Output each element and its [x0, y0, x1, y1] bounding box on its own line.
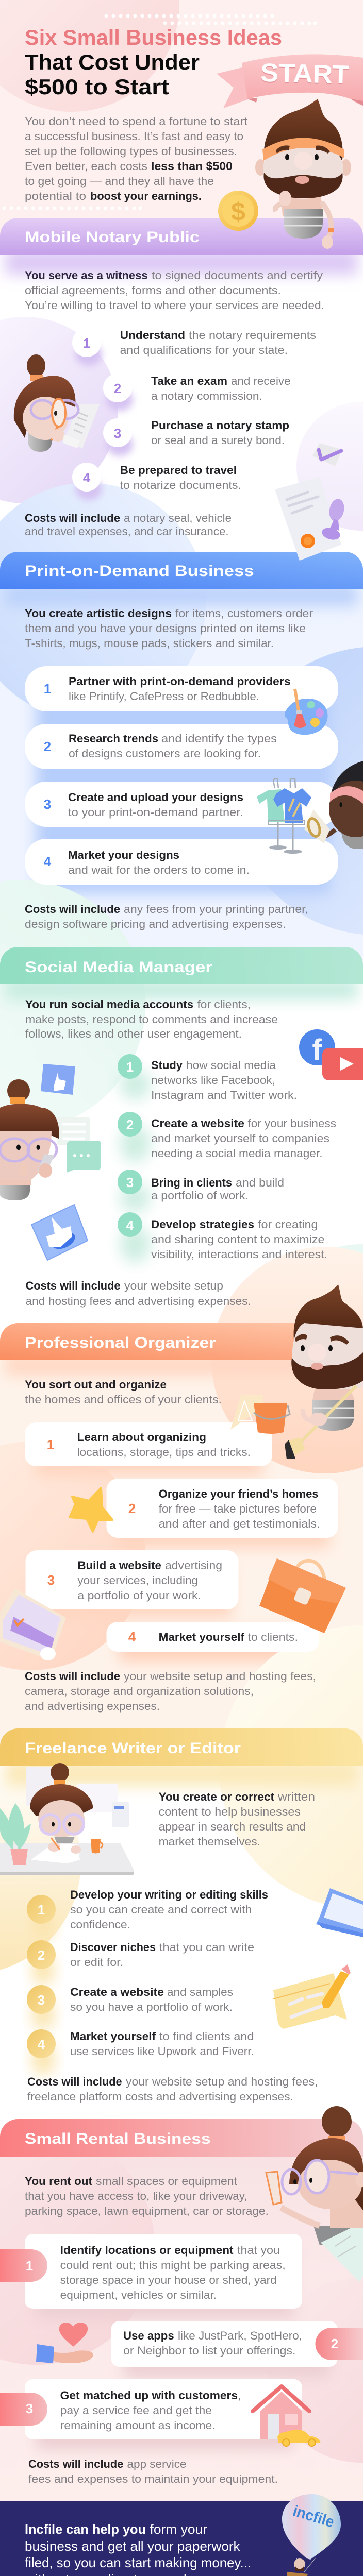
icon: man with headband: [255, 99, 351, 249]
step 1: so you can create and correct with: [70, 1903, 252, 1916]
title: $500 to Start: [25, 75, 169, 99]
card 2: 2: [331, 2336, 338, 2351]
card 1: Identify locations or equipment: [60, 2244, 234, 2257]
description: parking space, lawn equipment, car or storage.: [25, 2205, 269, 2217]
heading band: freelance writer: Freelance Writer or Editor: [25, 1740, 241, 1757]
costs: Costs will include: [26, 1279, 121, 1292]
step 3: and samples: [167, 1986, 233, 1998]
icon: heart over hand: [36, 2323, 93, 2363]
costs: freelance platform costs and advertising expenses.: [27, 2090, 293, 2103]
card 3: Create and upload your designs: [68, 791, 243, 804]
panel: footer call to action: [0, 2501, 363, 2576]
step 3: 3: [114, 426, 121, 441]
intro hero panel text: [2, 14, 317, 210]
panel: professional organizer: [0, 1323, 363, 1713]
intro paragraph: a successful business. It’s fast and easy to: [25, 130, 243, 143]
panel: footer call to action: form your: [150, 2521, 207, 2537]
step 2: or edit for.: [70, 1956, 123, 1969]
card 1: equipment, vehicles or similar.: [60, 2289, 217, 2301]
heading band: social media manager: Social Media Manager: [25, 959, 212, 976]
title: [25, 25, 282, 99]
icon: t-shirts on stands: [257, 778, 311, 854]
intro paragraph: potential to: [25, 190, 86, 202]
step 1: [27, 1888, 268, 1940]
icon: gold star: [70, 1488, 112, 1532]
description: You sort out and organize: [25, 1378, 167, 1391]
step 3: and build: [236, 1176, 284, 1189]
step 2: 2: [126, 1117, 134, 1132]
step 3: 3: [38, 1992, 45, 2008]
icon: girl with phone: [0, 1079, 101, 1200]
card 2: 2: [128, 1501, 136, 1516]
description: [25, 2175, 269, 2217]
icon: girl with phone and clipboard: [266, 2106, 363, 2282]
step 2: [118, 1112, 336, 1162]
step 2: for your business: [248, 1117, 336, 1130]
costs: app service: [127, 2458, 187, 2470]
step 4: 4: [126, 1217, 134, 1233]
card 2: Research trends: [69, 732, 158, 745]
icon: gold coin: $: [231, 197, 245, 226]
step 2: 2: [38, 1947, 45, 1963]
costs: and hosting fees and advertising expenses.: [26, 1295, 251, 1308]
decorative dot rows: [2, 14, 317, 210]
card 3: Build a website: [77, 1559, 161, 1572]
description: for items, customers order: [175, 607, 314, 620]
description: the homes and offices of your clients.: [25, 1393, 222, 1406]
heading band: social media manager: [0, 947, 363, 984]
icon: START ribbon: START: [260, 58, 350, 89]
card 2: [106, 1479, 338, 1538]
step 2: needing a social media manager.: [151, 1147, 323, 1160]
step 1: how social media: [186, 1059, 276, 1072]
costs: fees and expenses to maintain your equipment.: [28, 2472, 278, 2485]
intro paragraph: Even better, each costs: [25, 160, 147, 173]
description: [25, 1378, 222, 1406]
costs: your website setup and hosting fees,: [124, 1670, 316, 1683]
costs: camera, storage and organization solutions,: [25, 1685, 254, 1698]
step 4: [72, 463, 241, 500]
step 2: [103, 374, 291, 411]
heading band: print-on-demand: [0, 552, 363, 589]
description: them and you have your designs printed on items like: [25, 622, 306, 635]
card 3: 3: [44, 796, 51, 812]
costs: design software pricing and advertising expenses.: [25, 918, 286, 930]
description: You serve as a witness: [25, 269, 147, 282]
costs: [27, 2075, 318, 2103]
card 1: 1: [47, 1437, 54, 1452]
step 1: Develop your writing or editing skills: [70, 1888, 268, 1901]
card 2: of designs customers are looking for.: [69, 747, 261, 760]
step 3: [118, 1170, 284, 1212]
icon: laptop: [316, 1888, 363, 1937]
card 2: [25, 724, 338, 769]
icon: facebook badge: f: [312, 1033, 322, 1067]
step 4: to find clients and: [159, 2030, 254, 2043]
step 1: and qualifications for your state.: [120, 344, 288, 357]
step 4: 4: [83, 470, 91, 485]
card 2: or Neighbor to list your offerings.: [123, 2344, 295, 2357]
step 3: Purchase a notary stamp: [151, 419, 289, 432]
card 3: ,: [238, 2389, 241, 2402]
icon: girl with magnifier and paper: [14, 354, 100, 452]
icon: incfile hot air balloon: [282, 2494, 341, 2576]
step 1: confidence.: [70, 1918, 130, 1931]
description: market themselves.: [159, 1835, 260, 1848]
step 1: networks like Facebook,: [151, 1074, 275, 1087]
icon: orange briefcase: [259, 1558, 346, 1633]
icon: gold coin: [218, 191, 258, 231]
panel: mobile notary public: [0, 218, 363, 538]
step 1: 1: [126, 1059, 134, 1075]
step 4: use services like Upwork and Fiverr.: [70, 2045, 254, 2058]
step 4: to notarize documents.: [120, 479, 241, 492]
step 4: 4: [38, 2037, 45, 2052]
step 4: and sharing content to maximize: [151, 1233, 325, 1246]
step 1: 1: [38, 1902, 45, 1918]
card 2: and after and get testimonials.: [159, 1517, 320, 1530]
card 1: Partner with print-on-demand providers: [69, 675, 291, 688]
heading band: mobile notary public: [0, 218, 363, 255]
card 1: 1: [44, 681, 51, 697]
icon: stamped document: [275, 477, 346, 561]
step 4: Develop strategies: [151, 1218, 254, 1231]
card 2: [111, 2321, 363, 2367]
card 4: Market yourself: [159, 1631, 245, 1643]
icon: writer girl at desk: [0, 1763, 134, 1875]
step 3: a portfolio of work.: [151, 1189, 249, 1202]
heading band: small rental: Small Rental Business: [25, 2130, 211, 2147]
step 1: [118, 1054, 297, 1101]
heading band: freelance writer: [0, 1728, 363, 1766]
description: [25, 607, 314, 650]
icon: paint palette: [285, 689, 328, 735]
description: You’re willing to travel to where your services are needed.: [25, 299, 324, 312]
step 2: a notary commission.: [151, 389, 262, 402]
description: for clients,: [197, 998, 251, 1011]
step 2: that you can write: [159, 1941, 254, 1954]
icon: like tile lower: [31, 1205, 88, 1260]
costs: Costs will include: [25, 903, 120, 916]
costs: and advertising expenses.: [25, 1700, 160, 1713]
icon: wet floor sign and orange bucket: [230, 1395, 290, 1434]
description: You run social media accounts: [25, 998, 193, 1011]
step 1: the notary requirements: [189, 329, 316, 342]
step 3: or seal and a surety bond.: [151, 434, 285, 447]
step 2: Create a website: [151, 1117, 244, 1130]
step 1: 1: [83, 335, 90, 351]
card 4: and wait for the orders to come in.: [68, 863, 250, 876]
intro paragraph: boost your earnings.: [90, 190, 202, 202]
description: to signed documents and certify: [152, 269, 323, 282]
description: official agreements, forms and other documents.: [25, 284, 281, 297]
costs: your website setup: [124, 1279, 223, 1292]
card 4: [25, 839, 338, 885]
description: small spaces or equipment: [96, 2175, 238, 2188]
step 2: and receive: [231, 375, 291, 387]
card 3: your services, including: [77, 1574, 198, 1587]
icon: woman with braids and design: [304, 761, 363, 849]
intro paragraph: to get going — and they all have the: [25, 175, 214, 188]
card 1: [25, 666, 338, 711]
heading band: small rental: [0, 2119, 363, 2157]
costs: any fees from your printing partner,: [124, 903, 308, 916]
step 3: 3: [126, 1175, 134, 1190]
card 3: advertising: [165, 1559, 222, 1572]
panel: print-on-demand business: [0, 552, 363, 930]
card 3: pay a service fee and get the: [60, 2404, 212, 2417]
step 2: 2: [114, 381, 121, 396]
heading band: print-on-demand: Print-on-Demand Business: [25, 563, 254, 580]
card 4: 4: [128, 1629, 136, 1645]
description: [25, 998, 278, 1040]
costs: [28, 2458, 278, 2485]
costs: Costs will include: [28, 2458, 123, 2470]
step 1: Instagram and Twitter work.: [151, 1089, 297, 1101]
card 2: Use apps: [123, 2329, 174, 2342]
icon: checkmark tile: [312, 443, 342, 466]
card 2: 2: [44, 739, 51, 754]
card 1: like Printify, CafePress or Redbubble.: [69, 690, 259, 703]
heading band: professional organizer: [0, 1323, 363, 1360]
card 2: Organize your friend’s homes: [159, 1487, 319, 1500]
intro paragraph: set up the following types of businesses.: [25, 145, 237, 158]
card 3: to your print-on-demand partner.: [68, 806, 243, 819]
heading band: professional organizer: Professional Organizer: [25, 1334, 216, 1351]
step 4: [27, 2029, 254, 2075]
description: written: [277, 1790, 315, 1803]
description: You create artistic designs: [25, 607, 172, 620]
title: Six Small Business Ideas: [25, 25, 282, 49]
step 4: Be prepared to travel: [120, 464, 237, 477]
panel: social media manager: [0, 947, 363, 1308]
intro paragraph: You don’t need to spend a fortune to start: [25, 115, 248, 128]
step 3: Bring in clients: [151, 1176, 232, 1189]
costs: [26, 1279, 251, 1308]
step 2: Discover niches: [70, 1941, 156, 1954]
card 2: and identify the types: [161, 732, 277, 745]
costs: Costs will include: [25, 512, 120, 524]
costs: your website setup and hosting fees,: [126, 2075, 318, 2088]
costs: Costs will include: [25, 1670, 120, 1683]
icon: START ribbon: [217, 54, 363, 108]
card 1: 1: [26, 2258, 33, 2274]
icon: tablet with check: [0, 1588, 66, 1660]
card 2: like JustPark, SpotHero,: [178, 2329, 302, 2342]
card 4: [106, 1622, 319, 1652]
costs: and travel expenses, and car insurance.: [25, 525, 229, 538]
card 3: 3: [47, 1572, 55, 1588]
card 1: [25, 1422, 272, 1466]
intro paragraph: less than $500: [151, 160, 233, 173]
intro paragraph: [25, 115, 248, 202]
card 1: Learn about organizing: [77, 1431, 206, 1444]
step 2: [27, 1940, 254, 1985]
card 2: for free — take pictures before: [159, 1502, 317, 1515]
step 1: Study: [151, 1059, 183, 1072]
panel: small rental business: [0, 2119, 363, 2485]
step 4: Market yourself: [70, 2030, 156, 2043]
icon: speech bubble with pencil: [273, 1964, 351, 2029]
costs: Costs will include: [27, 2075, 122, 2088]
card 1: locations, storage, tips and tricks.: [77, 1446, 251, 1459]
step 3: [27, 1985, 233, 2030]
panel: footer call to action: business and get all your paperwork: [25, 2538, 241, 2554]
card 3: [26, 1550, 238, 1609]
card 3: a portfolio of your work.: [77, 1589, 201, 1602]
description: [25, 269, 324, 312]
title: That Cost Under: [25, 50, 200, 74]
costs: [25, 903, 308, 930]
card 1: that you: [237, 2244, 280, 2257]
icon: video play tile: [322, 1048, 363, 1080]
card 4: 4: [44, 854, 52, 869]
step 3: [103, 418, 289, 456]
card 1: [0, 2234, 302, 2309]
description: follows, likes and other user engagement.: [25, 1027, 242, 1040]
step 4: [118, 1212, 327, 1263]
step 3: so you have a portfolio of work.: [70, 2001, 233, 2013]
icon: incfile hot air balloon: incfile: [291, 2502, 336, 2531]
step 4: for creating: [258, 1218, 318, 1231]
card 1: storage space in your house or shed, yard: [60, 2274, 277, 2286]
step 4: visibility, interactions and interest.: [151, 1248, 327, 1261]
card 1: could rent out; this might be parking areas,: [60, 2259, 286, 2272]
card 4: to clients.: [248, 1631, 298, 1643]
costs: [25, 512, 232, 538]
description: make posts, respond to comments and increase: [25, 1013, 278, 1026]
panel: footer call to action: filed, so you can start making money...: [25, 2555, 251, 2570]
description: that you have access to, like your driveway,: [25, 2190, 248, 2202]
description: content to help businesses: [159, 1805, 301, 1818]
heading band: mobile notary public: Mobile Notary Public: [25, 229, 200, 246]
step 3: Create a website: [70, 1986, 164, 1998]
costs: [25, 1670, 316, 1713]
step 1: [72, 328, 316, 366]
costs: a notary seal, vehicle: [124, 512, 232, 524]
card 4: Market your designs: [68, 849, 179, 861]
description: appear in search results and: [159, 1820, 306, 1833]
card 3: [25, 782, 338, 827]
card 3: Get matched up with customers: [60, 2389, 238, 2402]
panel: footer call to action: Incfile can help you: [25, 2521, 146, 2537]
step 2: Take an exam: [151, 375, 227, 387]
description: [159, 1790, 315, 1848]
step 1: Understand: [120, 329, 185, 342]
panel: freelance writer or editor: [0, 1728, 363, 2103]
icon: facebook badge: [299, 1029, 335, 1067]
description: T-shirts, mugs, mouse pads, stickers and similar.: [25, 637, 274, 650]
icon: like tile upper: [41, 1064, 75, 1095]
icon: house with yellow car: [253, 2386, 321, 2446]
step 2: and market yourself to companies: [151, 1132, 329, 1145]
description: You rent out: [25, 2175, 92, 2188]
card 3: remaining amount as income.: [60, 2419, 216, 2432]
icon: man with broom: [285, 1284, 363, 1459]
card 3: 3: [26, 2401, 33, 2416]
card 3: [0, 2379, 302, 2439]
description: You create or correct: [159, 1790, 275, 1803]
